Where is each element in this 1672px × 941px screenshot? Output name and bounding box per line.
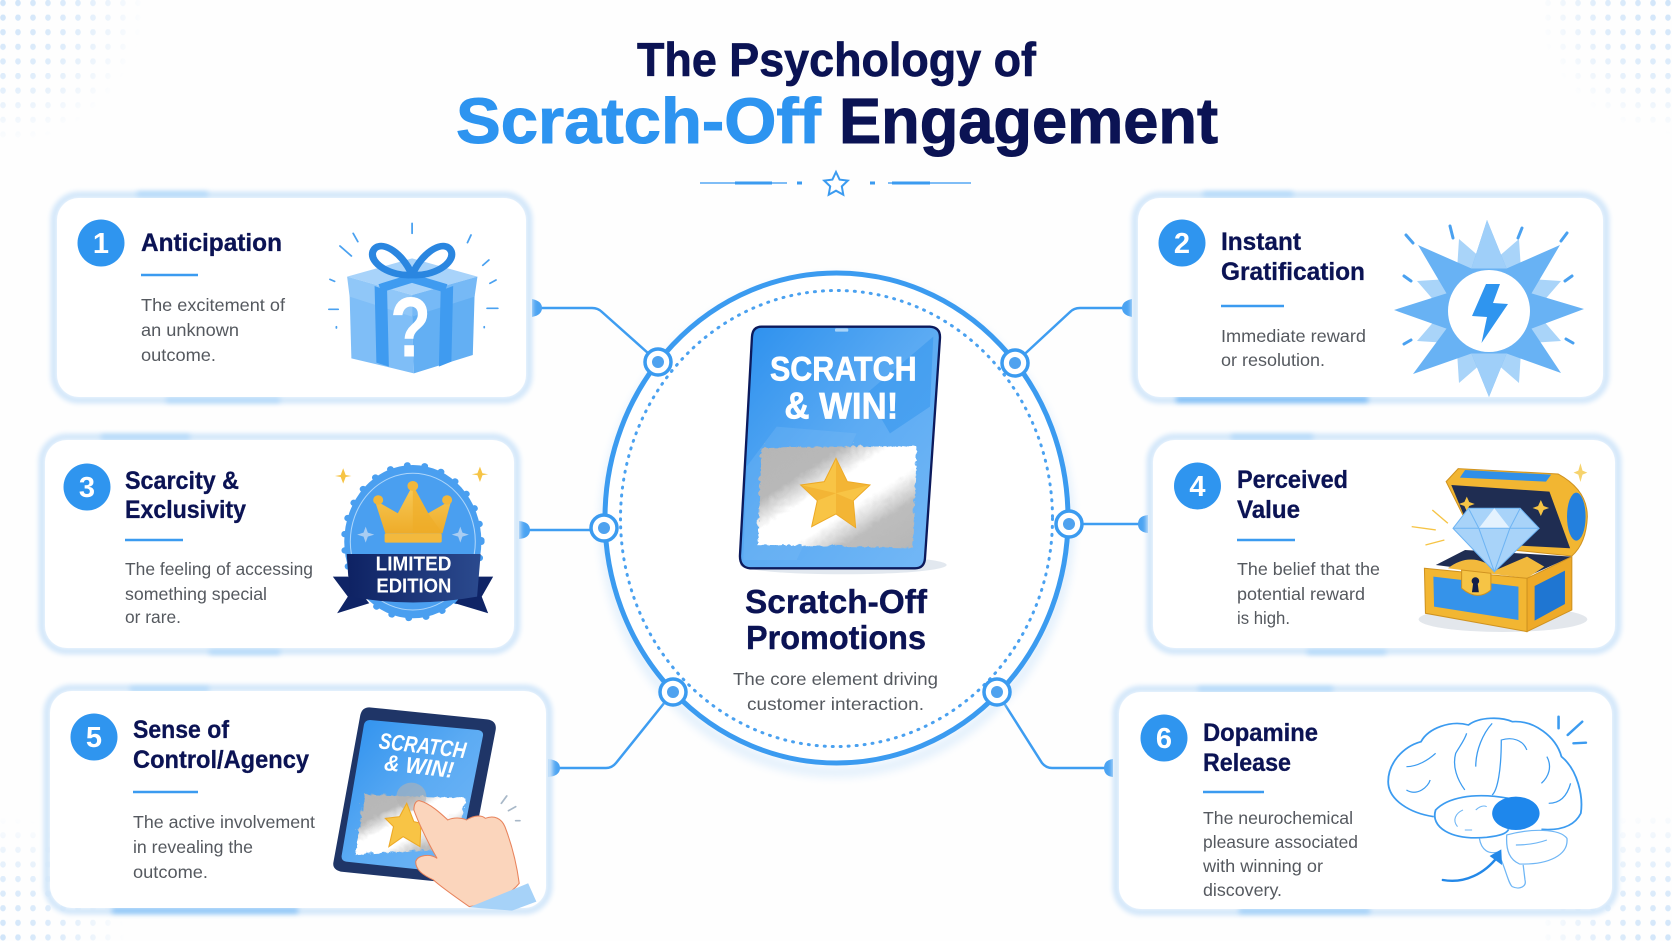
number badge 5: 5 — [86, 722, 102, 754]
card background — [54, 192, 529, 402]
icon: tablet with hand scratching — [333, 707, 536, 911]
underline — [1203, 791, 1264, 793]
card background — [47, 687, 549, 913]
underline — [141, 274, 198, 276]
icon: treasure chest with diamond — [1412, 463, 1587, 632]
icon: limited edition badge: LIMITED — [376, 553, 451, 575]
panel: 2 Instant Gratification — [1135, 192, 1606, 402]
description: The belief that the — [1237, 559, 1380, 579]
description: outcome. — [141, 345, 216, 365]
icon: brain — [1388, 717, 1586, 888]
icon: mystery gift box: ? — [390, 279, 431, 375]
number badge 3 — [64, 464, 110, 510]
central hub circle — [591, 273, 1082, 772]
number badge 2 — [1158, 220, 1206, 266]
panel: 6 Dopamine Release — [1116, 687, 1615, 913]
description: The neurochemical — [1203, 808, 1353, 828]
hub node: bottom right — [984, 679, 1010, 705]
heading: Gratification — [1221, 258, 1365, 286]
center label: Scratch-Off — [745, 583, 928, 620]
title: Scratch-Off — [456, 85, 822, 157]
description — [141, 295, 285, 365]
description: an unknown — [141, 320, 239, 340]
heading: Control/Agency — [133, 746, 309, 774]
number badge 1: 1 — [93, 228, 109, 260]
description: with winning or — [1202, 856, 1323, 876]
title divider with star — [700, 172, 971, 195]
connector: card 2 to hub — [1015, 299, 1132, 363]
icon: scratch and win card: & WIN! — [784, 385, 898, 426]
heading — [125, 467, 246, 524]
center label: Promotions — [746, 619, 926, 656]
description — [1237, 559, 1380, 628]
card background — [1150, 435, 1618, 654]
heading — [1203, 719, 1318, 777]
hub node: bottom left — [660, 679, 686, 705]
icon: tablet with hand scratching: SCRATCH — [378, 728, 468, 763]
icon: tablet with hand scratching: & WIN! — [383, 750, 455, 783]
heading: Dopamine — [1203, 719, 1318, 747]
number badge 2: 2 — [1174, 228, 1190, 260]
number badge 6: 6 — [1156, 723, 1172, 755]
description: in revealing the — [133, 837, 253, 857]
card background — [1116, 687, 1615, 913]
description: potential reward — [1237, 584, 1365, 604]
number badge 5 — [70, 714, 118, 760]
heading — [1221, 228, 1365, 286]
hub node: middle right — [1056, 511, 1082, 537]
title: The Psychology of — [637, 33, 1036, 86]
description: The feeling of accessing — [125, 559, 313, 579]
title — [456, 33, 1218, 157]
connector: card 5 to hub — [548, 692, 673, 777]
hub node: top left — [645, 349, 671, 375]
description: is high. — [1237, 608, 1290, 628]
underline — [133, 791, 198, 793]
icon: starburst with lightning bolt — [1394, 220, 1584, 397]
heading: Sense of — [133, 716, 230, 744]
hub node: top right — [1002, 350, 1028, 376]
description: The active involvement — [133, 812, 315, 832]
description: something special — [125, 584, 267, 604]
number badge 6 — [1140, 714, 1188, 762]
panel: 4 Perceived Value — [1150, 435, 1618, 654]
description — [125, 559, 313, 627]
center label: The core element driving — [733, 669, 938, 689]
center label — [733, 583, 938, 714]
heading: Anticipation — [141, 229, 282, 257]
underline — [125, 539, 183, 541]
heading: Exclusivity — [125, 496, 246, 524]
heading: Value — [1237, 496, 1300, 524]
description: The excitement of — [141, 295, 285, 315]
connector: card 1 to hub — [532, 299, 658, 362]
panel: 5 Sense of Control/Agency — [47, 687, 549, 913]
description: outcome. — [133, 862, 208, 882]
connector: card 6 to hub — [997, 692, 1113, 777]
panel: 1 Anticipation — [54, 192, 529, 402]
heading: Perceived — [1237, 466, 1348, 494]
title: Engagement — [839, 85, 1218, 157]
underline — [1237, 539, 1295, 541]
icon: scratch and win card: SCRATCH — [770, 351, 917, 389]
description: or resolution. — [1221, 350, 1325, 370]
heading: Release — [1203, 749, 1291, 777]
icon: scratch and win card — [740, 327, 947, 574]
connector: card 3 to hub — [519, 521, 604, 539]
underline — [1221, 305, 1284, 307]
center label: customer interaction. — [747, 694, 924, 714]
heading: Instant — [1221, 228, 1302, 256]
panel: 3 Scarcity and Exclusivity — [42, 435, 517, 654]
icon: limited edition badge — [333, 465, 493, 618]
description: Immediate reward — [1221, 326, 1366, 346]
number badge 3: 3 — [79, 472, 95, 504]
icon: limited edition badge: EDITION — [376, 575, 451, 597]
description: pleasure associated — [1203, 832, 1358, 852]
description: discovery. — [1203, 880, 1282, 900]
heading — [133, 716, 309, 774]
card background — [1135, 192, 1606, 402]
hub node: middle left — [591, 515, 617, 541]
number badge 1 — [78, 220, 124, 266]
heading — [1237, 466, 1348, 524]
icon: mystery gift box — [329, 223, 498, 375]
heading: Scarcity & — [125, 467, 239, 495]
description — [1202, 808, 1358, 900]
number badge 4 — [1174, 462, 1221, 510]
number badge 4: 4 — [1189, 471, 1206, 503]
card background — [42, 435, 517, 654]
connector: card 4 to hub — [1069, 515, 1148, 533]
description — [133, 812, 315, 882]
description: or rare. — [125, 607, 181, 627]
description — [1221, 326, 1366, 370]
